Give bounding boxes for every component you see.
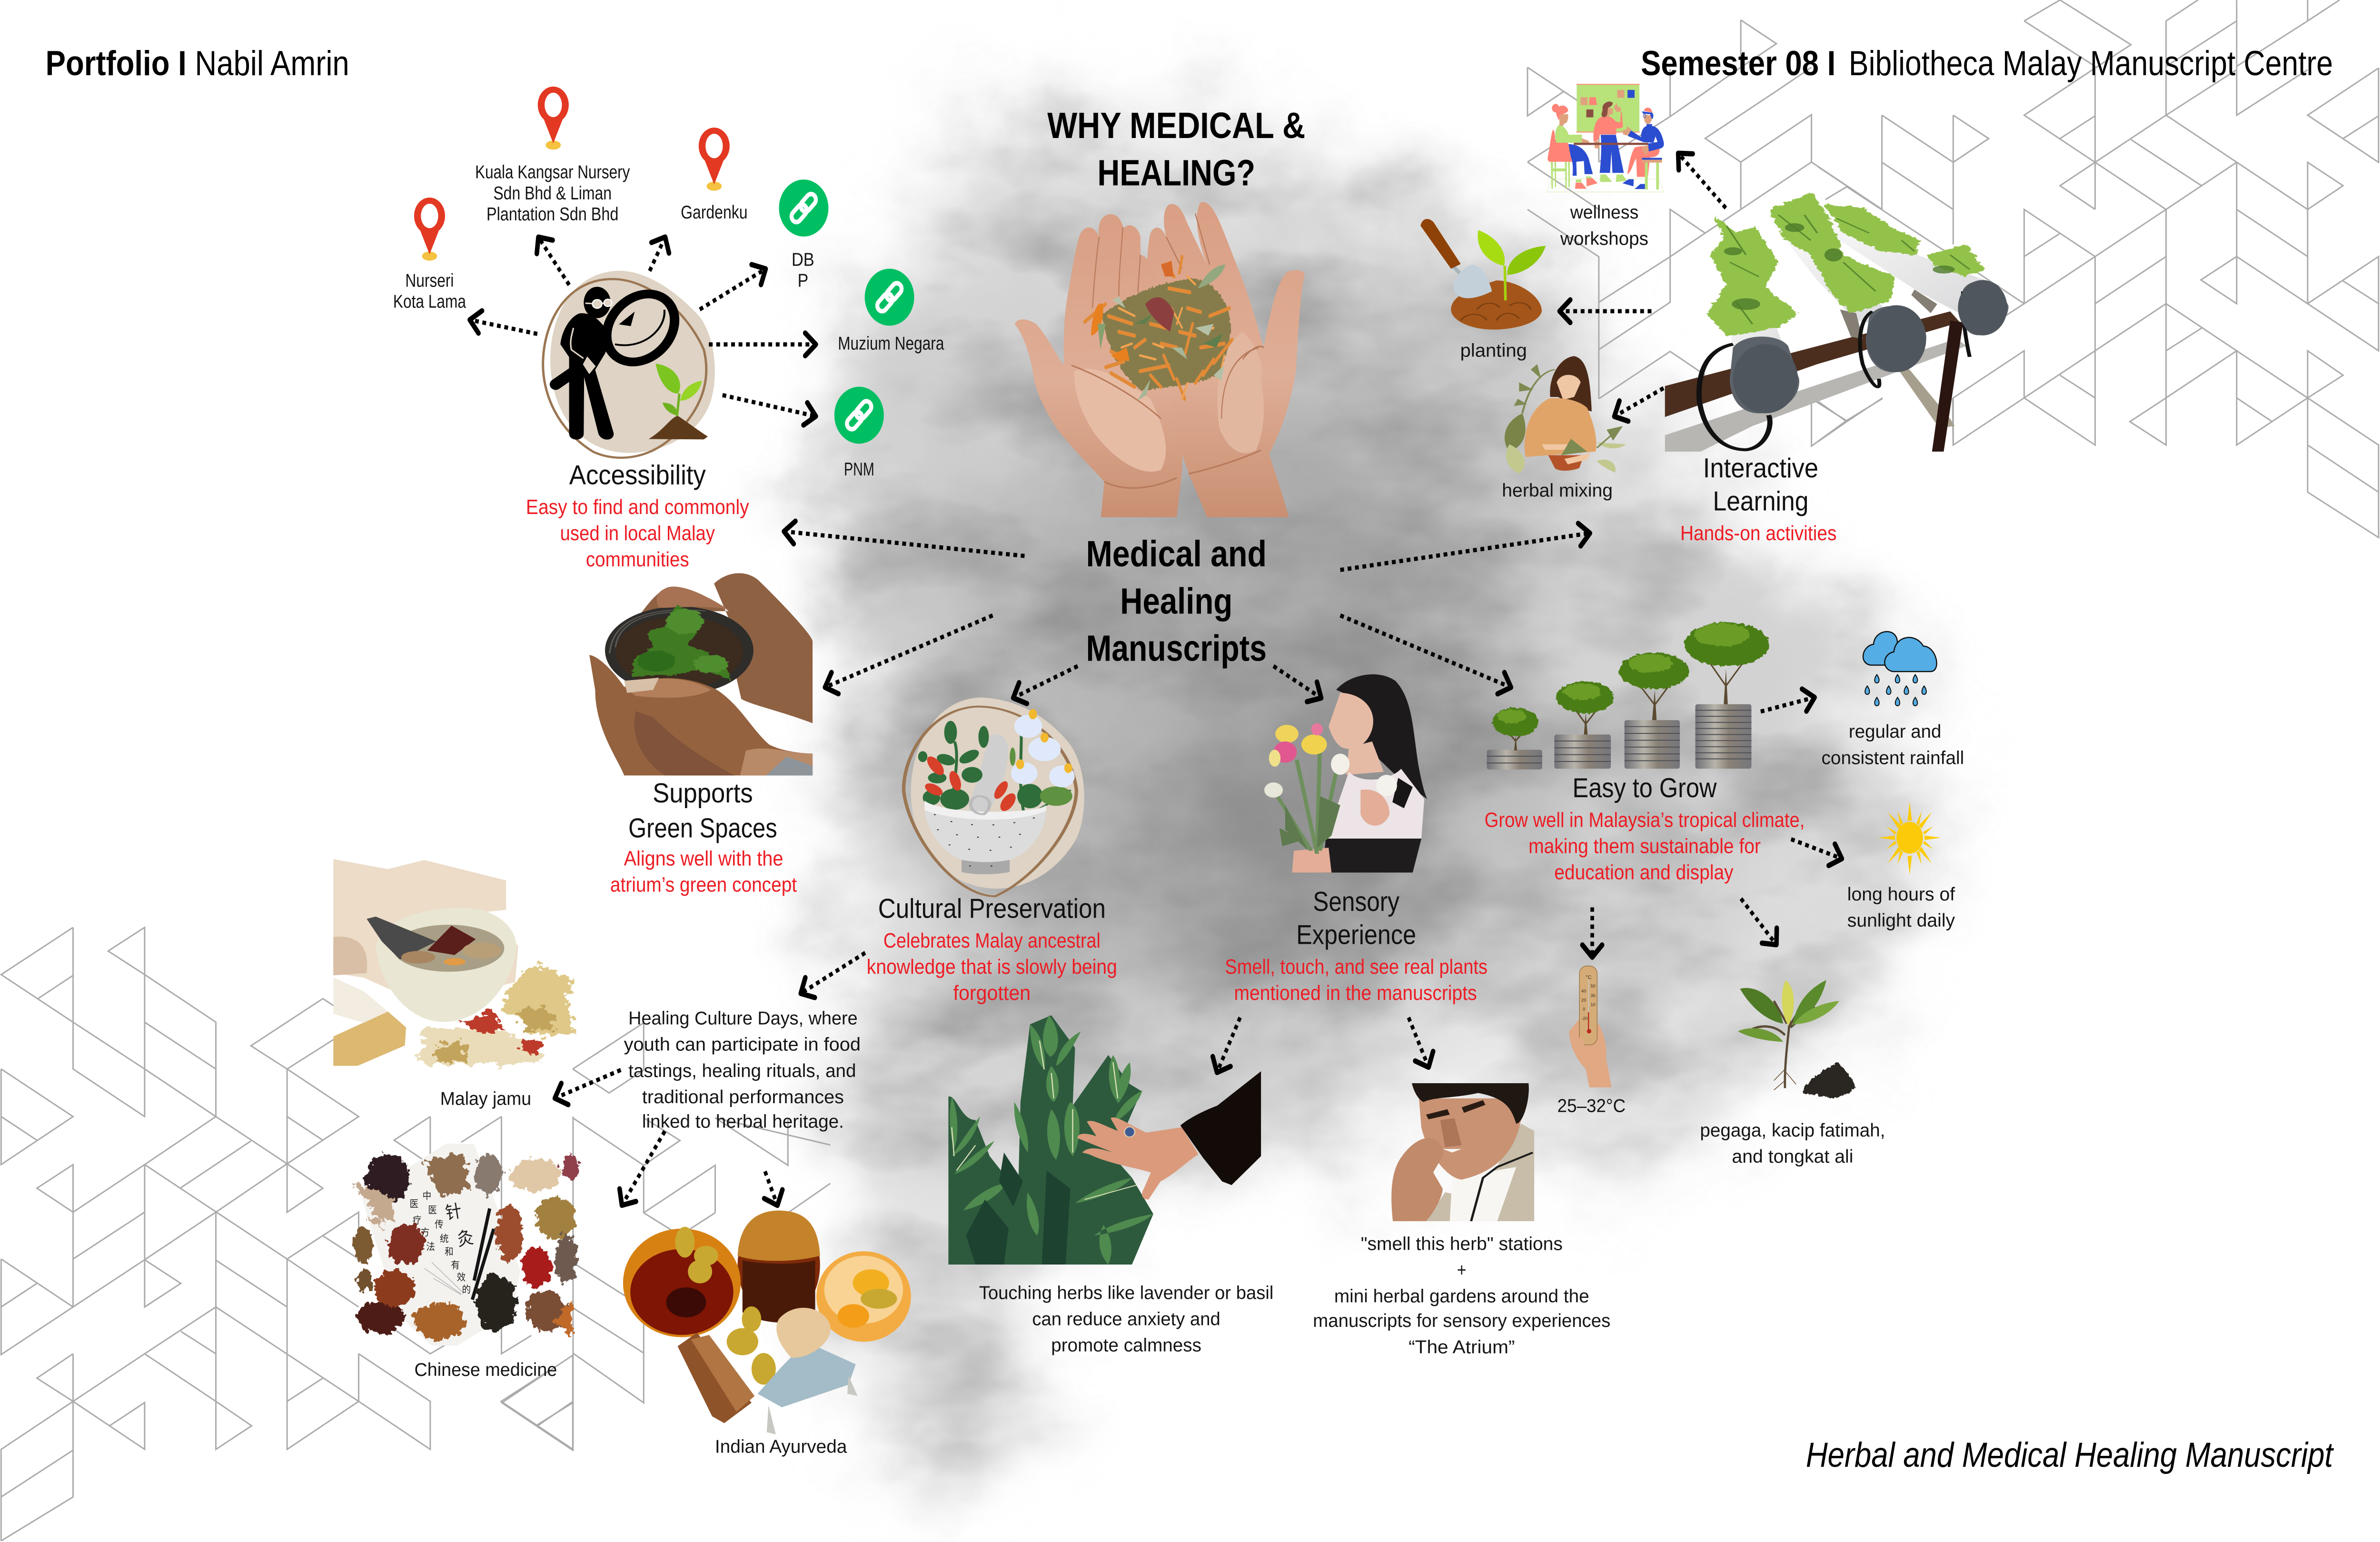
description: atrium’s green concept [610, 873, 797, 896]
image: chinese medicine herbs on paper: 效 [457, 1272, 466, 1283]
label: DBP [792, 249, 814, 291]
label: herb names [1700, 1120, 1885, 1166]
image: chinese medicine herbs on paper: 针 [444, 1201, 463, 1224]
text: smell this herb stations [1313, 1233, 1610, 1357]
image: hand holding thermometer: 50 [1590, 983, 1596, 988]
image: chinese medicine herbs on paper: 和 [445, 1246, 454, 1257]
icon: location pin Gardenku [699, 128, 730, 191]
decorative pattern: bottom left lines [1, 928, 573, 1541]
icon: link Muzium Negara [865, 269, 914, 326]
icon: planting trowel and seedling [1420, 219, 1546, 329]
header: semester and project: Bibliotheca Malay Manuscript Centre [1849, 44, 2333, 83]
label: herb names: and tongkat ali [1732, 1146, 1853, 1166]
text: smell this herb stations: "smell this herb" stations [1361, 1233, 1563, 1254]
image: hand touching herbs [948, 1015, 1261, 1265]
description: making them sustainable for [1528, 834, 1761, 858]
label: temperature: 25–32°C [1557, 1095, 1626, 1116]
heading: Supports [653, 778, 753, 809]
image: chinese medicine herbs on paper: 的 [462, 1284, 471, 1295]
image: hand holding thermometer: 30 [1590, 993, 1596, 998]
heading: medical and healing manuscripts: Healing [1120, 581, 1232, 622]
title: HEALING? [1097, 153, 1255, 193]
label: rainfall [1822, 721, 1964, 768]
description: Hands-on activities [1680, 522, 1836, 545]
icon: mortar, pestle and herbs [903, 697, 1084, 896]
label: wellness workshops: workshops [1560, 228, 1648, 249]
heading: Interactive [1703, 453, 1818, 484]
panel: accessibility [526, 271, 749, 571]
label: Gardenku: Gardenku [681, 202, 747, 223]
label: planting: planting [1460, 340, 1527, 361]
heading: medical and healing manuscripts [1086, 534, 1267, 669]
icon: link PNM [834, 387, 884, 444]
image: chinese medicine herbs on paper: 统 [440, 1234, 449, 1245]
description: knowledge that is slowly being [867, 955, 1117, 979]
text: smell this herb stations: + [1457, 1259, 1467, 1280]
image: chinese medicine herbs on paper: 中 [423, 1191, 431, 1202]
description: education and display [1554, 860, 1734, 884]
label: Kuala Kangsar nursery [475, 161, 630, 224]
panel: sensory experience [1225, 674, 1488, 1005]
text: smell this herb stations: “The Atrium” [1408, 1336, 1515, 1357]
text: healing culture days: tastings, healing rituals, and [628, 1060, 856, 1081]
heading: Green Spaces [628, 813, 777, 843]
heading: Easy to Grow [1573, 773, 1717, 803]
description: Easy to find and commonly [526, 495, 749, 519]
title [1047, 106, 1305, 193]
panel: interactive learning [1665, 193, 2009, 545]
description [1225, 955, 1488, 1005]
heading: Learning [1713, 486, 1808, 516]
description: Celebrates Malay ancestral [883, 929, 1101, 952]
image: hand holding thermometer: °C [1586, 975, 1592, 980]
description [867, 929, 1117, 1005]
description [1485, 808, 1805, 884]
image: hands holding dried herbs [1015, 202, 1305, 517]
label: rainfall: consistent rainfall [1822, 747, 1964, 768]
text: healing culture days: youth can participate in food [624, 1034, 861, 1055]
label: Nurseri Kota Lama [393, 270, 466, 312]
image: herb plant and soil [1738, 980, 1855, 1097]
label: DBP: DB [792, 249, 814, 270]
image: chinese medicine herbs on paper: 有 [451, 1260, 460, 1271]
image: chinese medicine herbs on paper: 医 [428, 1205, 437, 1216]
heading: Sensory [1313, 887, 1399, 917]
description: forgotten [953, 981, 1031, 1005]
heading: Cultural Preservation [878, 893, 1106, 924]
text: smell this herb stations: manuscripts for sensory experiences [1313, 1310, 1610, 1331]
description [526, 495, 749, 571]
text: touching herbs: Touching herbs like lavender or basil [979, 1282, 1273, 1303]
description: used in local Malay [560, 522, 715, 545]
label: DBP: P [798, 270, 808, 291]
decorative pattern: bottom middle lines [502, 1023, 830, 1450]
label: sunlight: sunlight daily [1847, 910, 1955, 930]
image: man smelling herb [1391, 1083, 1534, 1221]
heading: medical and healing manuscripts: Medical and [1086, 534, 1267, 574]
label: malay jamu: Malay jamu [440, 1088, 531, 1109]
icon: wellness workshop people [1547, 84, 1664, 192]
label: indian ayurveda: Indian Ayurveda [715, 1436, 847, 1457]
heading: Experience [1296, 919, 1416, 950]
description: Aligns well with the [624, 847, 783, 870]
panel: cultural preservation [867, 697, 1117, 1005]
description: communities [586, 548, 689, 571]
text: healing culture days [624, 1008, 861, 1132]
label: Nurseri Kota Lama: Kota Lama [393, 291, 466, 312]
decorative pattern: top right lines [1818, 0, 2379, 537]
image: woman smelling tulips [1264, 674, 1427, 872]
heading: Accessibility [569, 460, 706, 490]
heading [628, 778, 777, 843]
description: Smell, touch, and see real plants [1225, 955, 1488, 979]
label: herb names: pegaga, kacip fatimah, [1700, 1120, 1885, 1140]
icon: location pin Nurseri Kota Lama [414, 198, 445, 261]
image: chinese medicine herbs on paper: 医 [409, 1199, 418, 1210]
image: hand holding thermometer [1569, 966, 1612, 1087]
panel: supports green spaces [589, 573, 813, 896]
icon: woman mixing herbs [1505, 356, 1626, 474]
label: rainfall: regular and [1849, 721, 1941, 742]
icon: rain cloud [1863, 632, 1937, 706]
label: Kuala Kangsar nursery: Kuala Kangsar Nursery [475, 161, 630, 182]
label: Nurseri Kota Lama: Nurseri [405, 270, 454, 291]
image: hand holding thermometer: -20 [1581, 1016, 1588, 1021]
header: semester and project: Semester 08 I [1641, 44, 1835, 83]
label: chinese medicine: Chinese medicine [415, 1359, 557, 1380]
image: hands holding potted seedling [589, 573, 813, 775]
heading [1703, 453, 1818, 516]
header: portfolio: Portfolio I Nabil Amrin [46, 44, 349, 83]
text: healing culture days: Healing Culture Days, where [628, 1008, 858, 1028]
image: indian ayurveda tea [623, 1211, 911, 1434]
background: smoke cloud [827, 114, 1920, 1495]
description: Grow well in Malaysia’s tropical climate, [1485, 808, 1805, 831]
title: WHY MEDICAL & [1047, 106, 1305, 146]
icon: link DBP [779, 179, 828, 237]
text: touching herbs [979, 1282, 1273, 1355]
image: trees growing on coin stacks [1487, 622, 1769, 770]
image: malay jamu bowl [333, 859, 576, 1066]
icon: person with magnifier and seedling [543, 271, 715, 458]
label: Muzium Negara: Muzium Negara [838, 333, 944, 354]
text: touching herbs: promote calmness [1051, 1334, 1201, 1355]
description: mentioned in the manuscripts [1234, 981, 1477, 1005]
icon: location pin Kuala Kangsar [538, 87, 569, 149]
text: healing culture days: traditional performances [642, 1087, 844, 1107]
image: hydroponic lettuce pipes [1665, 193, 2009, 452]
label: sunlight: long hours of [1847, 884, 1955, 904]
image: chinese medicine herbs on paper [352, 1144, 579, 1345]
image: chinese medicine herbs on paper: 灸 [456, 1227, 475, 1250]
footer title: Herbal and Medical Healing Manuscript [1806, 1435, 2334, 1474]
heading: medical and healing manuscripts: Manuscripts [1086, 628, 1267, 669]
label: PNM: PNM [844, 459, 874, 480]
image: hand holding thermometer: 40 [1581, 988, 1586, 994]
image: chinese medicine herbs on paper: 方 [421, 1227, 429, 1238]
text: touching herbs: can reduce anxiety and [1032, 1308, 1220, 1329]
label: Kuala Kangsar nursery: Sdn Bhd & Liman [493, 183, 612, 203]
arrows: dotted connectors [471, 154, 1841, 1205]
image: hand holding thermometer: 10 [1590, 1002, 1596, 1007]
label: sunlight [1847, 884, 1955, 930]
label: wellness workshops [1560, 202, 1648, 249]
description [610, 847, 797, 896]
panel: easy to grow [1485, 622, 1805, 884]
label: Kuala Kangsar nursery: Plantation Sdn Bhd [486, 204, 618, 224]
text: healing culture days: linked to herbal heritage. [642, 1111, 844, 1132]
heading [1296, 887, 1416, 950]
decorative pattern: top middle lines [1527, 20, 1882, 446]
label: herbal mixing: herbal mixing [1502, 480, 1613, 501]
text: smell this herb stations: mini herbal gardens around the [1334, 1285, 1589, 1306]
icon: sun [1878, 802, 1941, 875]
image: chinese medicine herbs on paper: 法 [426, 1242, 435, 1253]
image: chinese medicine herbs on paper: 传 [435, 1219, 444, 1230]
image: hand holding thermometer: 20 [1581, 997, 1586, 1003]
image: chinese medicine herbs on paper: 疗 [413, 1215, 421, 1226]
image: hand holding thermometer: 0 [1583, 1007, 1585, 1012]
label: wellness workshops: wellness [1570, 202, 1638, 223]
